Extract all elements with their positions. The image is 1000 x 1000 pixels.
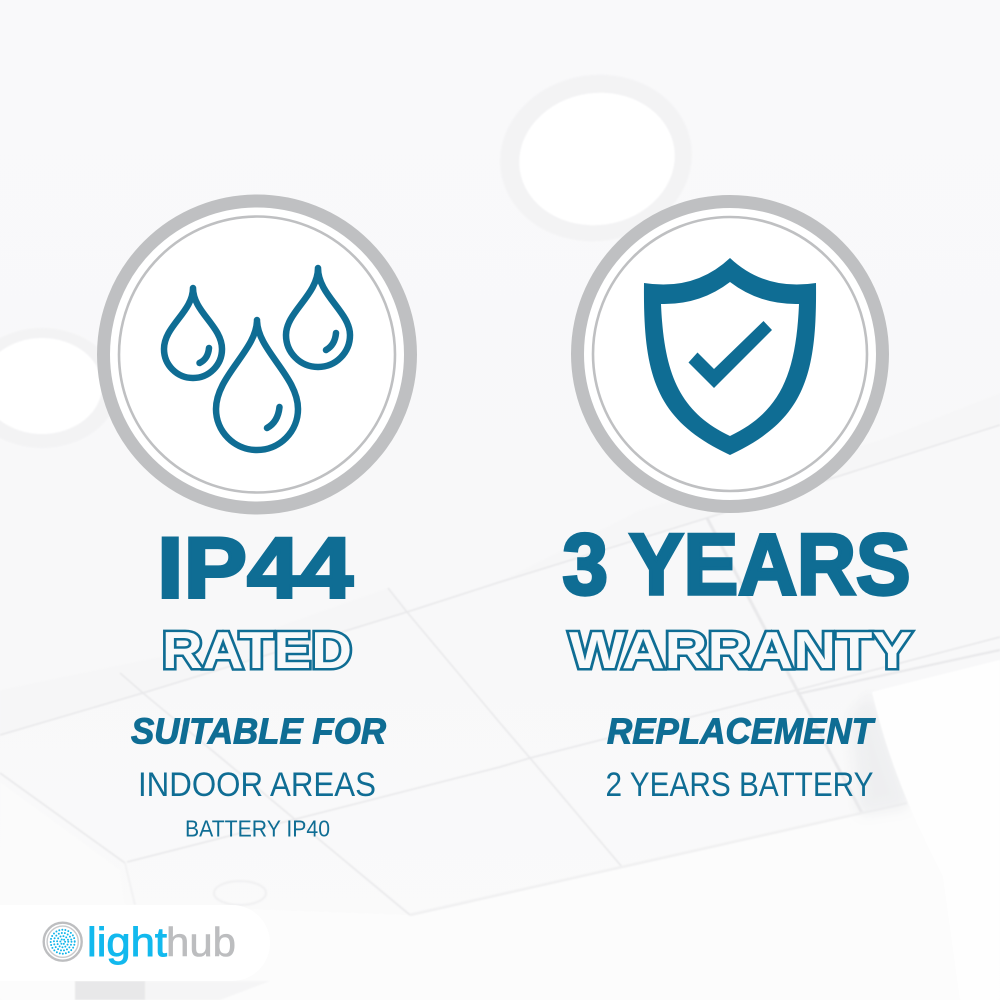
panel: IP44 rated — [97, 194, 417, 842]
badge: water circle — [97, 194, 417, 514]
text: suitable for: SUITABLE FOR — [131, 710, 386, 752]
logo: lighthub badge — [0, 905, 270, 981]
text: indoor areas: INDOOR AREAS — [138, 766, 376, 804]
large light panel — [872, 660, 1000, 1000]
text: 2 years battery: 2 YEARS BATTERY — [606, 766, 874, 804]
panel: 3 years warranty — [562, 195, 912, 804]
heading: 3 years: 3 YEARS — [562, 517, 910, 613]
grid lines — [0, 425, 1000, 915]
icon: water drops — [164, 268, 350, 450]
heading: IP44: IP44 — [157, 520, 353, 616]
text: battery IP40: BATTERY IP40 — [185, 816, 330, 842]
text: replacement: REPLACEMENT — [607, 710, 876, 752]
icon: shield with check — [644, 258, 816, 455]
heading: RATED outline: RATED — [162, 622, 352, 680]
heading: warranty outline: WARRANTY — [569, 622, 912, 680]
text: lighthub wordmark: light — [87, 919, 168, 965]
lower white ceiling band — [0, 780, 1000, 1000]
icon: logo mark — [44, 923, 82, 961]
text: hub wordmark: hub — [166, 919, 236, 965]
badge: shield circle — [571, 195, 889, 513]
